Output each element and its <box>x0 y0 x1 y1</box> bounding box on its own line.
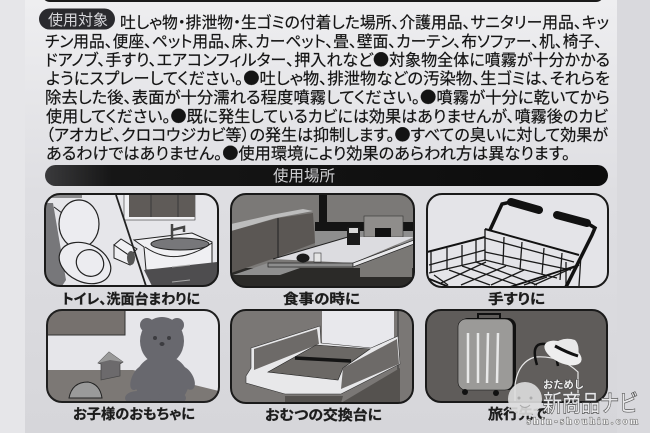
body text lines: ドアノブ、手すり、エアコンフィルター、押入れなど●対象物全体に噴霧が十分かかる <box>45 46 610 70</box>
watermark: site logo: おためし <box>543 377 584 392</box>
badge: 使用対象: 使用対象 <box>48 9 108 30</box>
label: toys: お子様のおもちゃに <box>73 404 195 424</box>
text block: usage targets <box>39 8 610 164</box>
panel: handrail basket <box>427 194 608 287</box>
label: toilet: トイレ、洗面台まわりに <box>62 289 200 309</box>
body text lines: ようにスプレーしてください。●吐しゃ物、排泄物などの汚染物、生ゴミは、それらを <box>46 65 610 89</box>
watermark: site logo <box>508 377 638 427</box>
body text lines: 使用してください。●既に発生しているカビには効果はありませんが、噴霧後のカビ <box>46 103 608 127</box>
panel: dining <box>231 194 414 287</box>
label: dining: 食事の時に <box>283 289 360 309</box>
top dark bar <box>42 0 604 2</box>
watermark: site logo: shin-shouhin.com <box>527 417 638 427</box>
body text lines <box>45 9 610 164</box>
label: changing table: おむつの交換台に <box>265 405 382 425</box>
body text lines: あるわけではありません。●使用環境により効果のあらわれ方は異なります。 <box>46 140 570 164</box>
label: handrail: 手すりに <box>488 289 545 309</box>
panel: toilet and washbasin <box>45 194 218 292</box>
panel: toys <box>47 310 219 407</box>
body text lines: （アオカビ、クロコウジカビ等）の発生は抑制します。●すべての臭いに対して効果が <box>46 122 608 146</box>
label: travel: 旅行先で <box>488 404 548 424</box>
panel: diaper changing table <box>231 310 413 403</box>
icon: mascot <box>508 382 542 416</box>
heading bar: 使用場所: 使用場所 <box>273 164 335 186</box>
body text lines: 除去した後、表面が十分濡れる程度噴霧してください。●噴霧が十分に乾いてから <box>45 84 610 108</box>
heading bar: 使用場所 <box>45 164 608 186</box>
body text lines: 吐しゃ物・排泄物・生ゴミの付着した場所、介護用品、サニタリー用品、キッ <box>120 9 609 33</box>
panel: travel <box>426 310 607 402</box>
body text lines: チン用品、便座、ペット用品、床、カーペット、畳、壁面、カーテン、布ソファー、机、椅子、 <box>45 28 602 52</box>
